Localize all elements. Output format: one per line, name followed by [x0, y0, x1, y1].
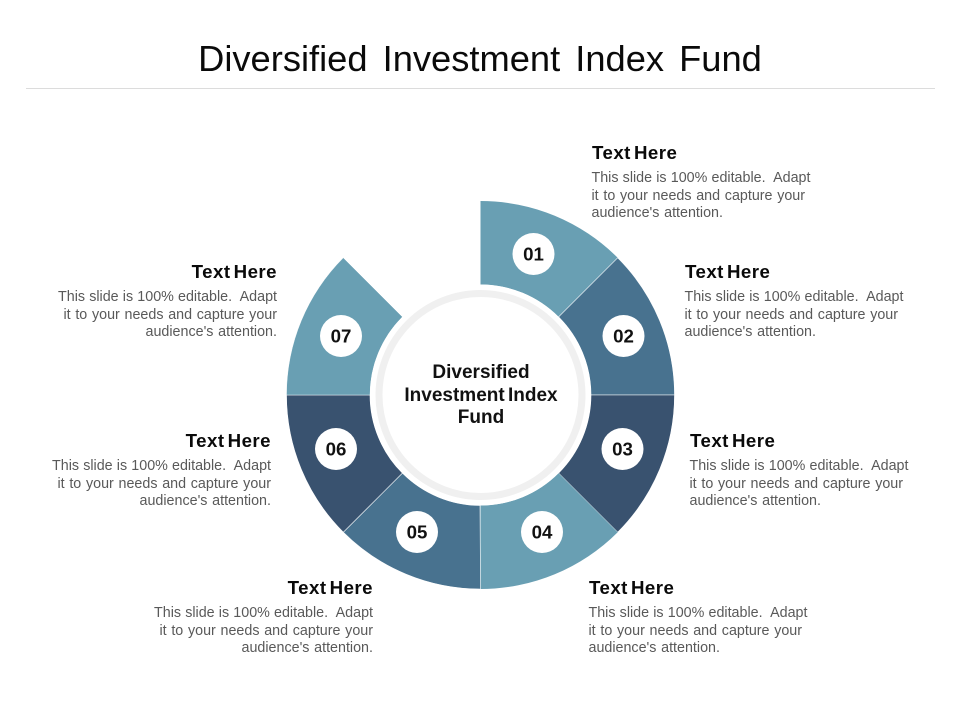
- text block 04: audience's attention.: [588, 640, 720, 656]
- text block 02: [684, 261, 903, 340]
- text block 07: audience's attention.: [146, 324, 277, 340]
- text block 06: This slide is 100% editable. Adapt: [52, 458, 271, 474]
- badge 05: [396, 511, 438, 553]
- segment 06: [286, 395, 402, 532]
- center label: Investment Index: [404, 385, 558, 406]
- text block 04: Text Here: [589, 577, 674, 598]
- text block 07: it to your needs and capture your: [63, 307, 277, 323]
- text block 07: Text Here: [192, 261, 277, 282]
- badge 04: 04: [532, 522, 553, 542]
- text block 05: it to your needs and capture your: [159, 623, 373, 639]
- badge 07: 07: [331, 326, 351, 346]
- segment 07: [286, 258, 402, 395]
- text block 03: audience's attention.: [690, 493, 821, 509]
- center label: Diversified: [432, 362, 530, 383]
- text block 03: This slide is 100% editable. Adapt: [690, 458, 908, 474]
- text block 06: Text Here: [186, 430, 271, 451]
- badge 06: [315, 428, 357, 470]
- text block 01: This slide is 100% editable. Adapt: [592, 170, 810, 186]
- center circle: [370, 284, 591, 506]
- text block 05: Text Here: [288, 577, 373, 598]
- badge 01: [512, 233, 554, 275]
- text block 04: This slide is 100% editable. Adapt: [588, 605, 807, 621]
- badge 05: 05: [407, 522, 427, 542]
- text block 06: [52, 430, 271, 509]
- text block 02: audience's attention.: [684, 324, 816, 340]
- badge 07: [320, 315, 362, 357]
- text block 07: This slide is 100% editable. Adapt: [58, 289, 277, 305]
- text block 05: [154, 577, 373, 656]
- text block 02: it to your needs and capture your: [684, 307, 898, 323]
- text block 07: [58, 261, 277, 340]
- donut chart: [286, 201, 674, 589]
- badge 06: 06: [326, 438, 346, 460]
- center label: Fund: [458, 407, 504, 428]
- text block 03: it to your needs and capture your: [690, 476, 903, 492]
- segment 02: [559, 258, 674, 395]
- title: Diversified Investment Index Fund: [198, 38, 762, 79]
- badge 02: 02: [613, 326, 634, 346]
- segment 05: [343, 473, 480, 589]
- badge 04: [521, 511, 563, 553]
- text block 06: it to your needs and capture your: [57, 476, 271, 492]
- text block 05: This slide is 100% editable. Adapt: [154, 605, 373, 621]
- badge 02: [602, 315, 644, 357]
- text block 01: Text Here: [592, 142, 677, 163]
- text block 01: [592, 142, 810, 221]
- text block 02: This slide is 100% editable. Adapt: [684, 289, 903, 305]
- text block 02: Text Here: [685, 261, 770, 282]
- badge 03: [602, 428, 644, 470]
- text block 04: it to your needs and capture your: [588, 623, 802, 639]
- segment 04: [480, 473, 618, 589]
- text block 05: audience's attention.: [242, 640, 373, 656]
- text block 03: [690, 430, 908, 509]
- text block 06: audience's attention.: [140, 493, 271, 509]
- text block 01: it to your needs and capture your: [592, 188, 805, 204]
- text block 04: [588, 577, 807, 656]
- badge 01: 01: [523, 244, 544, 264]
- text block 01: audience's attention.: [592, 205, 723, 221]
- segment 01: [480, 201, 618, 317]
- segment 03: [559, 395, 674, 532]
- badge 03: 03: [612, 438, 633, 460]
- text block 03: Text Here: [690, 430, 775, 451]
